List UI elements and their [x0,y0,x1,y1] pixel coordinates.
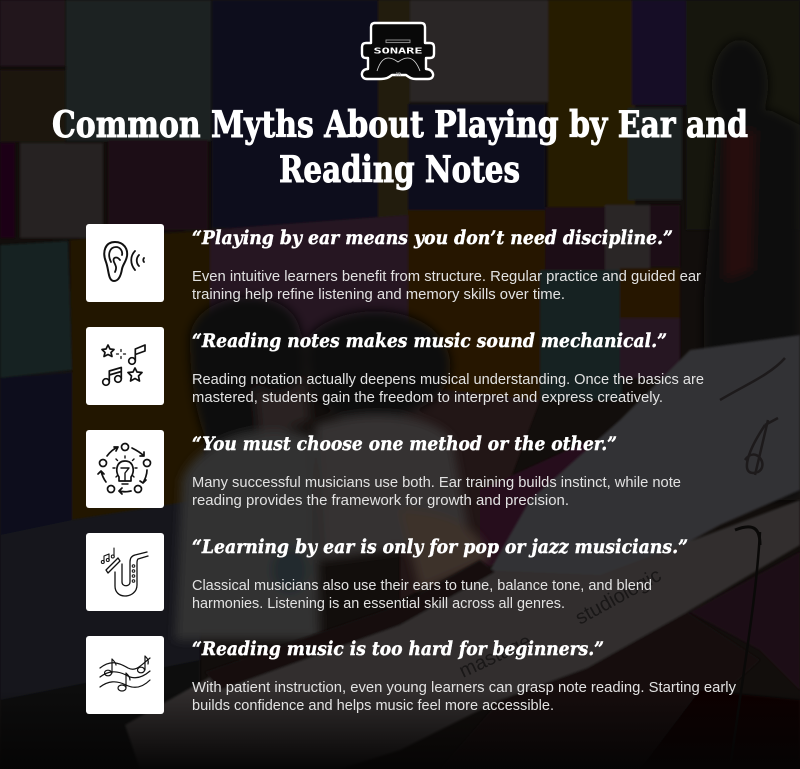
logo: Sonare piano emblem [362,23,434,79]
myth 3 heading: “You must choose one method or the other.” [192,433,617,455]
logo: Sonare piano emblem: SONARE [374,46,423,56]
icon: music notes on wavy staff [86,636,164,714]
piano body [125,500,800,769]
icon: ear with sound waves [86,224,164,302]
myth 5 text [192,680,737,714]
myth 2 text [192,372,704,406]
myth 3 [86,430,681,509]
title: Reading Notes [279,149,520,191]
myth 3 text: Many successful musicians use both. Ear training builds instinct, while note [192,475,681,491]
icon: light bulb in a cycle [86,430,164,508]
teacher silhouette [712,40,768,130]
myth 4 text [192,578,652,612]
myth 1 [86,224,701,303]
myth 5 [86,636,737,714]
background: darkened photo of piano class: studiologic [572,564,665,629]
myth 1 text: training help refine listening and memory skills over time. [192,287,565,303]
children [190,297,304,470]
myth 2 heading: “Reading notes makes music sound mechanical.” [192,330,667,352]
logo: Sonare piano emblem: JR [395,72,401,78]
myth 2 text: mastered, students gain the freedom to interpret and express creatively. [192,390,663,406]
myth 1 text: Even intuitive learners benefit from structure. Regular practice and guided ear [192,269,701,285]
background: darkened photo of piano class: mastage [456,630,535,683]
myth 4 text: harmonies. Listening is an essential skill across all genres. [192,596,565,612]
myth 3 text [192,475,681,509]
myth 5 text: builds confidence and helps music feel more accessible. [192,698,554,714]
myth 3 text: reading provides the framework for growth and precision. [192,493,569,509]
treble clefs on sheet [745,418,778,475]
myth 2 text: Reading notation actually deepens musical understanding. Once the basics are [192,372,704,388]
myth 2 [86,327,704,406]
myth 4 heading: “Learning by ear is only for pop or jazz musicians.” [192,536,688,558]
myth 5 text: With patient instruction, even young learners can grasp note reading. Starting early [192,680,737,696]
pink floor and gear [690,552,800,690]
icon: saxophone with notes [86,533,164,611]
title [52,104,748,191]
music desk / sheet [490,335,800,590]
myth 1 text [192,269,701,303]
keys [205,560,495,690]
myth 4 [86,533,688,612]
myth 4 text: Classical musicians also use their ears to tune, balance tone, and blend [192,578,652,594]
icon: stars and music notes [86,327,164,405]
myth 1 heading: “Playing by ear means you don’t need discipline.” [192,227,673,249]
myth 5 heading: “Reading music is too hard for beginners.” [192,638,604,660]
